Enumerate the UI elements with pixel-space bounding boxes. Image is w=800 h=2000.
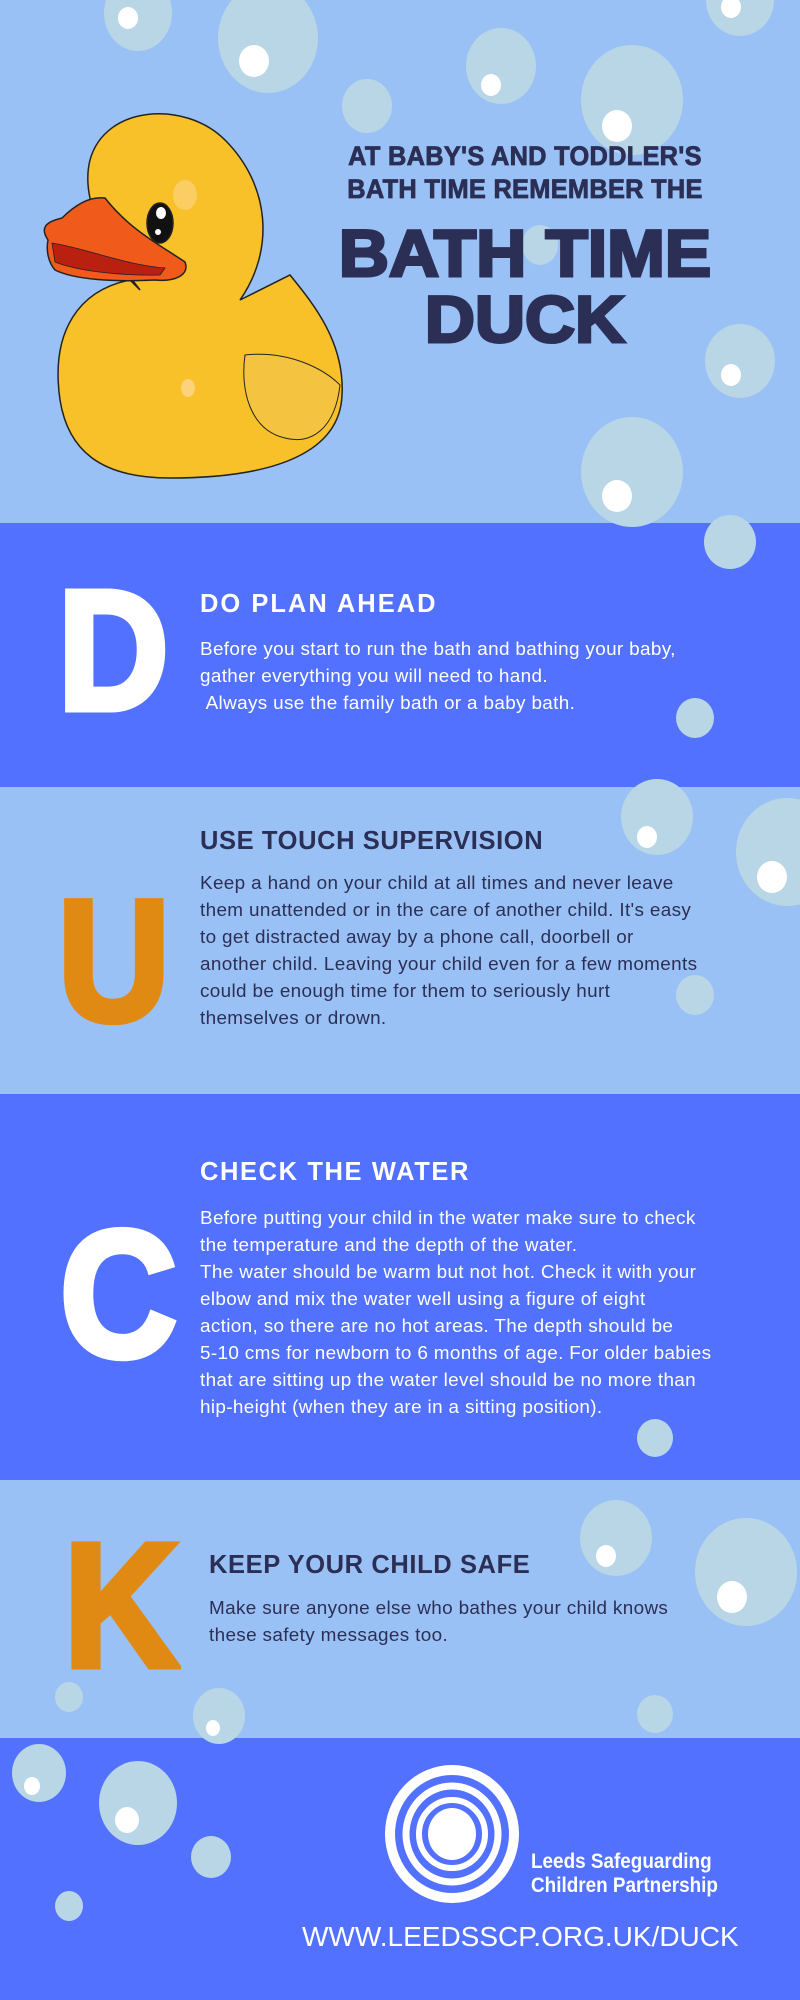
panel: U section [0,787,800,1094]
logo text [531,1850,718,1897]
text: touch supervision: another child. Leaving your child even for a few moments [200,954,697,975]
main title [339,216,711,356]
letter U: U [58,865,170,1057]
text: check the water: that are sitting up the water level should be no more than [200,1370,696,1391]
text: check the water: Before putting your child in the water make sure to check [200,1208,696,1229]
heading: do plan ahead: DO PLAN AHEAD [200,590,438,618]
panel: K section [0,1480,800,1738]
text: do plan ahead: Always use the family bath or a baby bath. [206,693,575,714]
title [339,141,711,356]
text: check the water: hip-height (when they are in a sitting position). [200,1397,603,1418]
text: check the water: 5-10 cms for newborn to 6 months of age. For older babies [200,1343,711,1364]
logo: LSCP spiral [385,1765,519,1903]
text: keep child safe: these safety messages too. [209,1625,448,1646]
panel: C section [0,1094,800,1480]
letter D: D [58,556,169,746]
text: touch supervision: could be enough time for them to seriously hurt [200,981,610,1002]
text: touch supervision: them unattended or in the care of another child. It's easy [200,900,691,921]
letter C: C [60,1194,177,1395]
text: do plan ahead: Before you start to run the bath and bathing your baby, [200,639,676,660]
subtitle: BATH TIME REMEMBER THE [347,174,703,204]
text: check the water: elbow and mix the water well using a figure of eight [200,1289,646,1310]
main title: BATH TIME [339,216,711,290]
panel: D section [0,523,800,787]
text: check the water [200,1208,711,1418]
panel: footer [0,1738,800,2000]
subtitle: AT BABY'S AND TODDLER'S [348,141,702,171]
subtitle [347,141,703,204]
text: keep child safe [209,1598,668,1646]
text: touch supervision [200,873,697,1029]
logo text: Leeds Safeguarding [531,1850,712,1873]
panel: header [0,0,800,523]
text: check the water: action, so there are no hot areas. The depth should be [200,1316,673,1337]
illustration: rubber duck [44,113,343,479]
website url: WWW.LEEDSSCP.ORG.UK/DUCK [302,1921,739,1952]
text: touch supervision: themselves or drown. [200,1008,387,1029]
text: keep child safe: Make sure anyone else who bathes your child knows [209,1598,668,1619]
heading: check the water: CHECK THE WATER [200,1158,470,1186]
main title: DUCK [425,282,625,356]
logo text: Children Partnership [531,1874,718,1897]
letter K: K [64,1508,178,1704]
text: touch supervision: to get distracted away by a phone call, doorbell or [200,927,634,948]
heading: keep child safe: KEEP YOUR CHILD SAFE [209,1551,530,1579]
text: do plan ahead [200,639,676,714]
heading: touch supervision: USE TOUCH SUPERVISION [200,827,543,855]
text: touch supervision: Keep a hand on your child at all times and never leave [200,873,674,894]
text: do plan ahead: gather everything you will need to hand. [200,666,548,687]
text: check the water: the temperature and the depth of the water. [200,1235,577,1256]
text: check the water: The water should be warm but not hot. Check it with your [200,1262,696,1283]
